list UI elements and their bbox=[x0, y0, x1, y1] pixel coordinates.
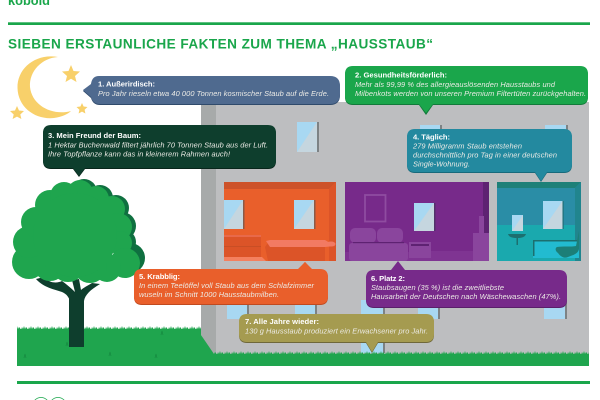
lower windows bbox=[227, 300, 567, 353]
building bbox=[201, 102, 589, 356]
tree canopy shadow bbox=[71, 179, 145, 273]
callout 5: Krabblig: 5. Krabblig: bbox=[139, 272, 180, 281]
icon: star left bbox=[10, 106, 24, 119]
callout 1: Außerirdisch bbox=[83, 76, 340, 105]
callout 4: Täglich bbox=[407, 129, 572, 182]
callout 2: Gesundheitsförderlich: 2. Gesundheitsförderlich: bbox=[355, 70, 447, 80]
callout 4: Täglich: 4. Täglich: bbox=[413, 132, 450, 142]
callout 4: Täglich: Single-Wohnung. bbox=[413, 160, 470, 168]
callout 3: Mein Freund der Baum bbox=[43, 125, 276, 177]
callout 4: Täglich: durchschnittlich pro Tag in einer deutschen bbox=[413, 150, 557, 160]
callout 2: Gesundheitsförderlich: Milbenkots werden von unseren Premium Filtertüten zurückgehalten. bbox=[355, 89, 586, 98]
room: bathroom bbox=[497, 182, 581, 261]
icon: star large bbox=[62, 65, 80, 82]
callout 3: Mein Freund der Baum: Ihre Topfpflanze kann das in kleinerem Rahmen auch! bbox=[48, 150, 230, 158]
footer rule bbox=[17, 381, 590, 384]
callout 3: Mein Freund der Baum: 1 Hektar Buchenwald filtert jährlich 70 Tonnen Staub aus der Luft. bbox=[48, 140, 268, 150]
title: SIEBEN ERSTAUNLICHE FAKTEN ZUM THEMA „HAUSSTAUB“ bbox=[8, 36, 433, 52]
callout 6: Platz 2: 6. Platz 2: bbox=[371, 274, 405, 283]
callout 5: Krabblig: wuseln im Schnitt 1000 Hausstaubmilben. bbox=[139, 290, 279, 299]
callout 6: Platz 2: Hausarbeit der Deutschen nach Wäschewaschen (47%). bbox=[371, 292, 561, 301]
grass bbox=[17, 325, 589, 366]
callout 5: Krabblig bbox=[134, 262, 328, 305]
room: bedroom bbox=[224, 182, 336, 261]
callout 2: Gesundheitsförderlich: Mehr als 99,99 % des allergieauslösenden Hausstaubs und bbox=[355, 80, 556, 89]
callout 2: Gesundheitsförderlich bbox=[345, 66, 588, 115]
room: living room bbox=[345, 182, 489, 261]
icon: star right bbox=[76, 103, 88, 114]
header rule bbox=[8, 22, 590, 25]
callout 6: Platz 2 bbox=[366, 261, 567, 308]
tree canopy bbox=[12, 180, 140, 283]
callout 7: Alle Jahre wieder: 7. Alle Jahre wieder: bbox=[245, 317, 319, 326]
callout 4: Täglich: 279 Milligramm Staub entstehen bbox=[412, 142, 522, 150]
tree trunk and branches bbox=[36, 277, 100, 347]
footer logo arcs bbox=[32, 398, 66, 400]
callout 1: Außerirdisch: 1. Außerirdisch: bbox=[98, 80, 155, 88]
callout 5: Krabblig: In einem Teelöffel voll Staub aus dem Schlafzimmer bbox=[139, 281, 315, 290]
icon: crescent moon bbox=[17, 56, 71, 118]
callout 3: Mein Freund der Baum: 3. Mein Freund der Baum: bbox=[48, 131, 141, 140]
tree bbox=[12, 179, 145, 347]
callout 6: Platz 2: Staubsaugen (35 %) ist die zweitliebste bbox=[371, 283, 504, 292]
callout 1: Außerirdisch: Pro Jahr rieseln etwa 40 000 Tonnen kosmischer Staub auf die Erde. bbox=[98, 89, 329, 98]
callout 7: Alle Jahre wieder: 130 g Hausstaub produziert ein Erwachsener pro Jahr. bbox=[245, 326, 428, 336]
upper windows bbox=[297, 122, 568, 152]
callout 7: Alle Jahre wieder bbox=[239, 314, 434, 353]
